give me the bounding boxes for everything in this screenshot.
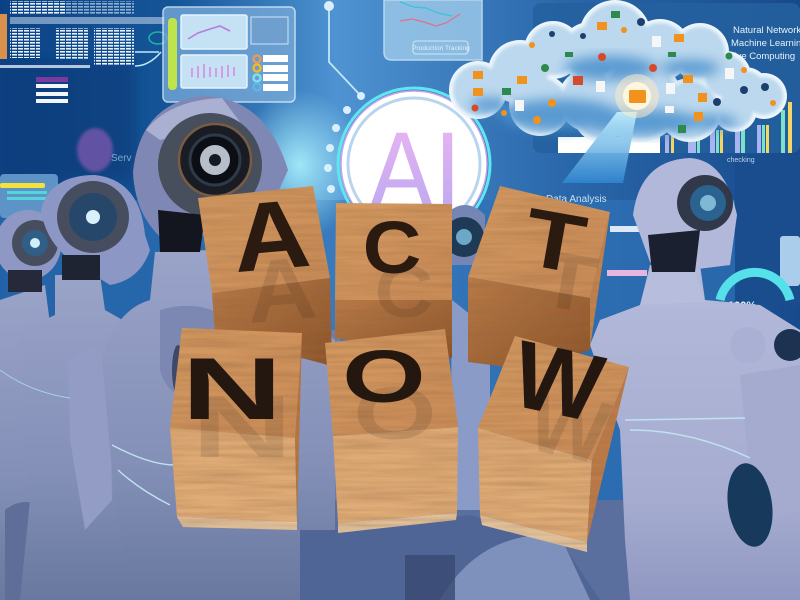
wooden block: T: T <box>532 233 603 331</box>
panel: status and data analysis screen: Cognitive Computing <box>707 51 795 62</box>
panel: production tracking <box>384 0 482 60</box>
wooden block: W: W <box>520 371 618 484</box>
wooden block: W <box>478 320 629 552</box>
panel: production tracking: Production Tracking <box>412 45 470 52</box>
panel: dashboard with charts <box>163 7 295 102</box>
AI emblem circle: AI <box>369 109 461 235</box>
wooden block: C: C <box>375 251 433 333</box>
wooden block: O: O <box>353 372 437 455</box>
panel: left status bars <box>0 174 58 218</box>
wooden block: O: O <box>342 335 426 418</box>
beam from cloud folder <box>562 112 637 183</box>
panel: code readout top left <box>0 1 167 103</box>
wooden block: A: A <box>228 178 314 293</box>
panel: status and data analysis screen <box>533 3 800 312</box>
wooden block: A <box>198 178 332 366</box>
robot: far left background <box>0 210 61 600</box>
robot: back center <box>300 205 600 600</box>
wooden block: N: N <box>191 377 293 476</box>
icon: main folder <box>629 90 646 103</box>
wooden block: N <box>170 328 302 530</box>
wooden block: C: C <box>363 207 421 289</box>
AI emblem circle <box>338 88 490 240</box>
cloud with app icons <box>449 0 787 183</box>
panel: status and data analysis screen: 100% <box>728 300 756 312</box>
wooden block: T: T <box>517 191 592 292</box>
panel: status and data analysis screen: Data Analysis <box>546 194 607 205</box>
panel: status and data analysis screen: checking <box>727 157 755 164</box>
wooden block: C <box>335 203 452 358</box>
wooden block: N: N <box>181 339 283 438</box>
wooden block: W: W <box>504 320 612 442</box>
wooden block: T <box>468 186 610 370</box>
wooden block: O <box>325 329 458 533</box>
connector line with nodes <box>324 1 365 193</box>
wooden block: A: A <box>242 237 320 342</box>
robot: second left <box>0 175 150 600</box>
robot: central, large <box>102 96 335 600</box>
service label left: Serv <box>111 153 132 164</box>
robot: right <box>590 158 800 600</box>
panel: status and data analysis screen: Natural Network <box>733 25 800 36</box>
